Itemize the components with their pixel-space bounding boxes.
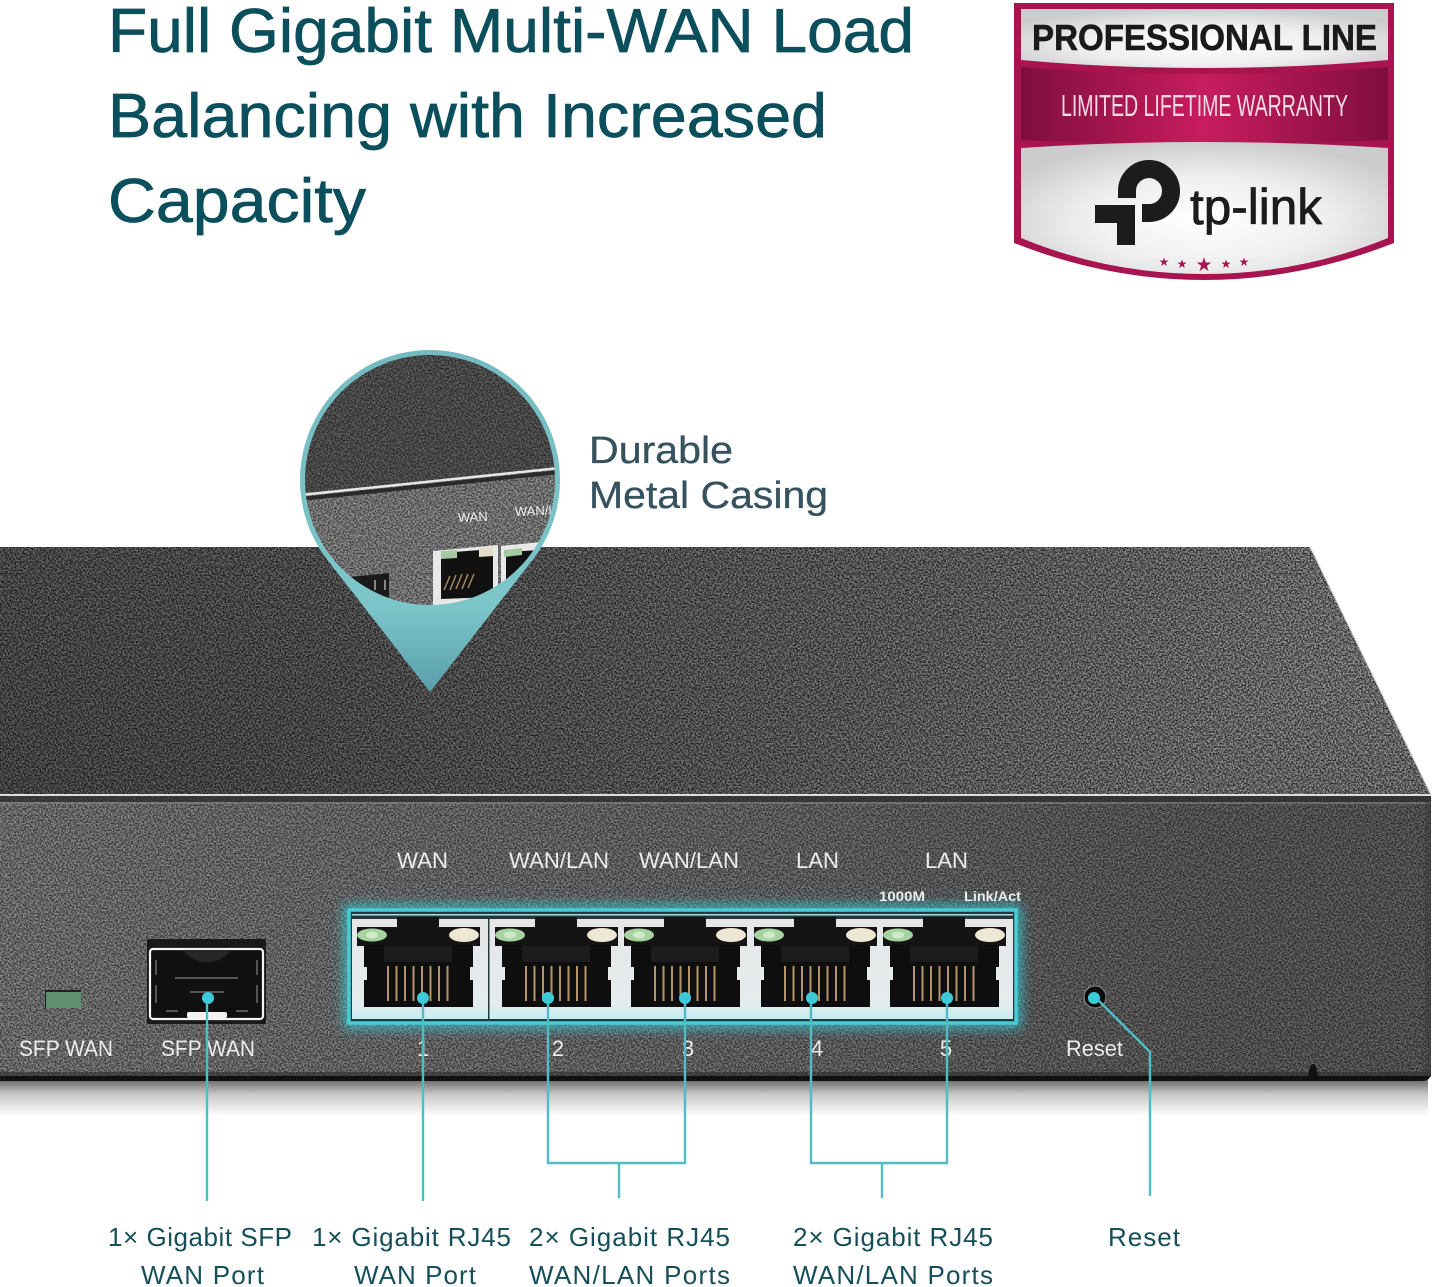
router body (0, 547, 1431, 1116)
teal outline (349, 910, 1016, 1023)
heading: Full Gigabit Multi-WAN Load Balancing with Increased Capacity (108, 0, 914, 236)
label: RJ45 WAN port (312, 1222, 511, 1287)
port 1 (357, 917, 480, 1007)
port 2 (495, 917, 618, 1007)
panel labels above ports (397, 848, 968, 873)
teal glow (349, 910, 1016, 1023)
callout text: Durable Metal Casing: Durable (589, 430, 733, 472)
panel labels above ports: WAN/LAN (509, 848, 609, 873)
label: SFP WAN port: 1× Gigabit SFP (108, 1222, 292, 1252)
router front face (0, 794, 1431, 1081)
floor shadow (0, 1080, 1428, 1116)
label: reset: Reset (1108, 1222, 1181, 1252)
panel labels above ports: WAN/LAN (639, 848, 739, 873)
leader: WAN/LAN ports bracket (548, 998, 685, 1198)
callout anchor dots (202, 992, 1100, 1004)
magnifier content (305, 355, 555, 605)
panel labels below ports: 5 (940, 1036, 952, 1061)
leader: reset (1095, 997, 1150, 1196)
reset hole (1084, 986, 1106, 1008)
badge title text: PROFESSIONAL LINE (1032, 17, 1377, 58)
label: SFP WAN port (108, 1222, 292, 1287)
badge bottom silver panel (1021, 142, 1388, 274)
panel labels below ports (19, 1036, 1123, 1061)
white port frames (352, 919, 1013, 1019)
magnifier content: WAN/LAN (515, 502, 574, 519)
heading: Full Gigabit Multi-WAN Load Balancing with Increased Capacity: Balancing with Increased (108, 82, 827, 151)
port 4 (754, 917, 877, 1007)
badge top silver band (1021, 9, 1388, 68)
panel labels below ports: SFP WAN (161, 1036, 255, 1061)
port 3 (624, 917, 747, 1007)
heading: Full Gigabit Multi-WAN Load Balancing with Increased Capacity: Capacity (108, 167, 366, 236)
leader: WAN port (422, 998, 424, 1201)
badge crimson band (1021, 67, 1388, 143)
panel labels above ports: LAN (796, 848, 839, 873)
panel labels below ports: 2 (552, 1036, 564, 1061)
badge stars: ★ (1195, 255, 1213, 276)
panel labels below ports: Reset (1066, 1036, 1123, 1061)
feature labels (108, 1222, 1181, 1287)
badge stars: ★ (1159, 255, 1169, 269)
port 5 (883, 917, 1006, 1007)
panel labels below ports: 1 (417, 1036, 429, 1061)
label: RJ45 WAN/LAN ports (529, 1222, 730, 1287)
panel labels above ports: WAN (397, 848, 448, 873)
magnifier content: WAN (458, 509, 488, 525)
highlighted RJ45 port group (349, 910, 1016, 1023)
panel labels below ports: SFP WAN (19, 1036, 113, 1061)
callout leader lines (207, 997, 1150, 1201)
callout: metal casing magnifier (300, 350, 574, 692)
leader: LAN ports bracket (811, 998, 947, 1198)
badge stars: ★ (1177, 257, 1187, 271)
indicator LED: SFP WAN (45, 990, 81, 1008)
badge stars: ★ (1239, 255, 1249, 269)
tp-link wordmark: tp-link (1190, 179, 1323, 235)
panel labels below ports: 3 (682, 1036, 694, 1061)
port: SFP cage (147, 939, 266, 1024)
callout text: Durable Metal Casing (589, 430, 828, 517)
panel labels above ports: LAN (925, 848, 968, 873)
label: RJ45 WAN/LAN ports: 2× Gigabit RJ45 (529, 1222, 730, 1252)
badge stars (1159, 255, 1249, 276)
label: RJ45 WAN port: 1× Gigabit RJ45 (312, 1222, 511, 1252)
magnifier pin (300, 350, 560, 692)
icon: tp-link logo mark (1095, 169, 1171, 245)
label: second RJ45 WAN/LAN ports (793, 1222, 993, 1287)
badge: Professional Line limited lifetime warranty (1014, 3, 1394, 280)
port strip (349, 910, 1016, 1023)
panel labels below ports: 4 (811, 1036, 823, 1061)
router top face (0, 547, 1431, 795)
leader: SFP port (206, 998, 208, 1201)
badge stars: ★ (1221, 257, 1231, 271)
LED labels: 1000M (879, 889, 925, 904)
callout text: Durable Metal Casing: Metal Casing (589, 475, 828, 517)
badge outer shield (1014, 3, 1394, 280)
label: second RJ45 WAN/LAN ports: 2× Gigabit RJ45 (793, 1222, 993, 1252)
bottom edge notch (1308, 1064, 1318, 1078)
LED labels (879, 889, 1022, 904)
LED labels: Link/Act (964, 889, 1022, 904)
